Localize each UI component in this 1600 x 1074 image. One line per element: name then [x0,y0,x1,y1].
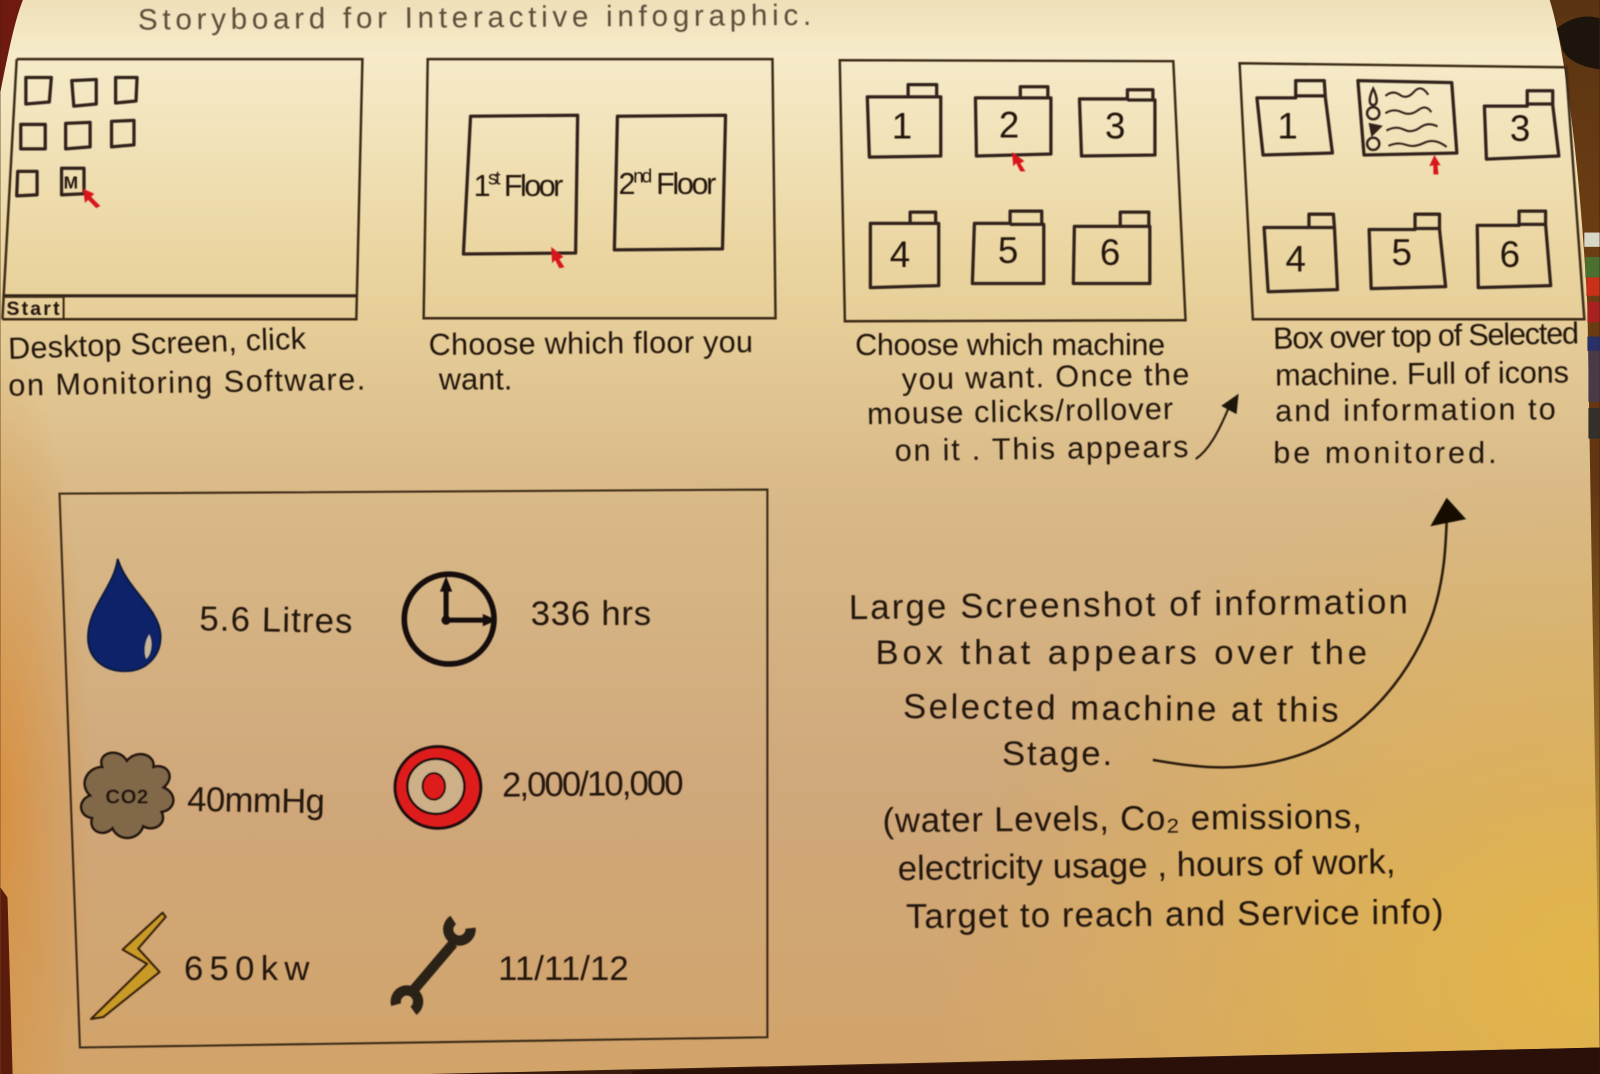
machine folder 2: 2 [999,105,1019,146]
machine folder 2 [975,87,1051,156]
bottom dark edge [633,1047,1600,1074]
desktop icons [17,78,137,196]
red cursor [1012,152,1025,171]
label: hours: 336 hrs [531,595,651,633]
caption 1: on Monitoring Software. [8,363,366,403]
machine folder 6: 6 [1100,232,1120,273]
1st floor card: 1 [474,169,491,203]
caption 4: Box over top of Selected [1273,316,1579,356]
caption 2: Choose which floor you [429,325,753,362]
machine folder 4: 4 [890,234,910,275]
icon: target [395,747,481,828]
text block: monitored items: Target to reach and Service info) [906,893,1444,936]
popup icons [1367,89,1380,150]
1st floor card: st [488,168,501,190]
2nd floor card: nd [633,166,652,188]
red cursor [83,189,100,208]
1st floor card [463,115,578,254]
small arrow from caption 3 to caption 4 [1196,394,1239,459]
coloured pens at right edge [1584,233,1600,439]
1st floor card: Floor [498,169,563,203]
text block: monitored items: (water Levels, Co₂ emissions, [882,798,1362,840]
machine folder 5 [972,211,1044,284]
panel 2: choose floor [424,59,776,318]
icon: wrench [396,920,471,1011]
caption 3: on it . This appears [894,430,1189,468]
big curved arrow [1153,498,1466,767]
machine folder 6: 6 [1500,234,1520,275]
label: electricity: 650kw [184,950,310,988]
page edge: maroon strip bottom-left [0,887,13,1074]
caption 2 [429,325,753,397]
machine folder 1: 1 [892,106,912,147]
panel 3: choose machine [840,60,1186,321]
popup text lines [1385,88,1447,147]
label: target: 2,000/10,000 [502,765,684,805]
icon: clock [404,574,497,664]
caption 4 [1273,316,1579,470]
text block: large screenshot description: Stage. [1002,735,1112,773]
machine folder 5 [1369,214,1446,289]
2nd floor card [614,115,726,250]
2nd floor card: 2 [618,167,635,201]
label: CO2 level: 40mmHg [187,781,325,821]
icon: CO2 cloud: CO2 [105,787,148,809]
desk objects top-right: dark shape [1557,16,1600,69]
caption 1 [8,322,366,403]
icon: water drop [88,559,161,671]
text block: monitored items [882,798,1444,936]
2nd floor card: Floor [650,167,716,201]
caption 1: Desktop Screen, click [8,322,307,366]
caption 3: Choose which machine [855,328,1165,362]
text block: large screenshot description: Selected machine at this [903,688,1339,730]
machine folder 4 [1264,214,1338,292]
large information box panel [60,490,767,1047]
caption 3: you want. Once the [902,358,1190,397]
machine folder 3: 3 [1510,108,1530,149]
caption 4: machine. Full of icons [1275,355,1569,393]
machine folder 6 [1477,211,1551,288]
caption 4: be monitored. [1273,436,1497,470]
label: service date: 11/11/12 [498,950,629,988]
caption 3 [855,328,1190,468]
caption 3: mouse clicks/rollover [867,392,1173,431]
machine folder 5: 5 [998,230,1018,271]
text block: large screenshot description [849,583,1408,773]
machine folder 3: 3 [1105,106,1125,147]
machine folder 4: 4 [1285,238,1306,279]
icon: CO2 cloud [81,753,173,838]
icon: lightning bolt [91,913,166,1019]
text block: large screenshot description: Large Screenshot of information [849,583,1408,627]
desktop icons: M [64,173,78,193]
red cursor [1429,155,1441,174]
machine folder 5: 5 [1392,232,1412,273]
caption 2: want. [438,363,512,397]
machine folder 3 [1079,90,1155,156]
red cursor [551,247,564,268]
page edge: maroon corner top-left [0,0,23,92]
label: water: 5.6 Litres [199,600,353,641]
machine folder 4 [870,212,939,288]
panel 1: desktop screen [2,59,362,320]
information popup box [1358,81,1457,155]
title: Storyboard for Interactive infographic. [138,0,811,37]
machine folder 6 [1073,212,1150,284]
machine folder 3 [1484,91,1559,159]
machine folder 1 [1257,81,1332,155]
panel 4: information box over selected machine [1240,63,1584,319]
start button: Start [6,298,60,320]
machine folder 1: 1 [1277,106,1298,147]
text block: monitored items: electricity usage , hours of work, [897,843,1396,888]
caption 4: and information to [1275,392,1556,428]
machine folder 1 [867,85,941,157]
text block: large screenshot description: Box that appears over the [875,634,1367,672]
